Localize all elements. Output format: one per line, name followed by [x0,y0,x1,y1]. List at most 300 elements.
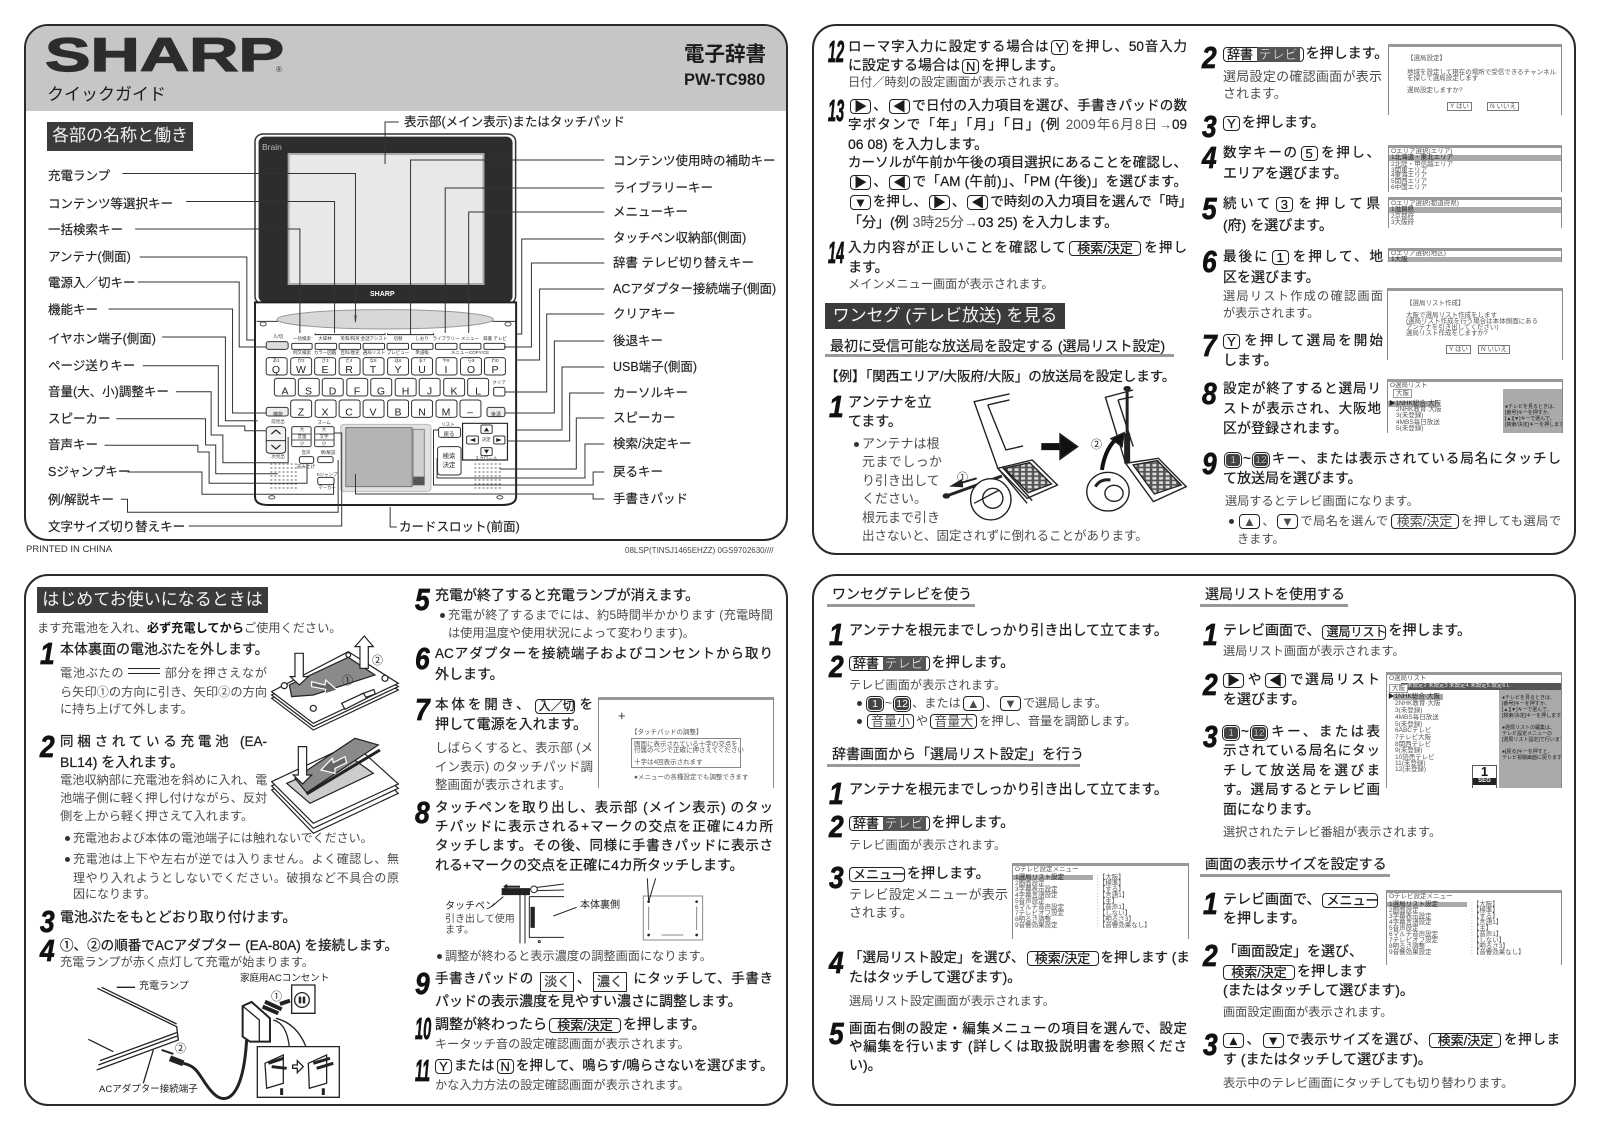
screen: list creation confirmation [1387,288,1563,360]
step 12: Y [1056,40,1064,55]
step 13: 06 08) を入力します。 [848,136,988,152]
screen: TV settings menu: 6マルチ音声設定 [1015,904,1064,911]
step 8: ストが表示され、大阪地 [1223,400,1381,416]
step 6: ACアダプターを接続端子およびコンセントから取り [435,646,773,661]
step 2: 選局設定の確認画面が表示 [1223,69,1382,84]
step 2: や を押し、音量を調節します。 [916,714,1136,728]
screen: station list: ●テレビを見るときは、 [1502,695,1555,701]
step 14: ます。 [848,259,889,275]
device illustration: X [321,406,329,418]
step 9: 濃く [597,974,623,988]
screen: TV settings menu 2: 5音声設定 [1389,925,1419,932]
device illustration: 英和/和英 [340,335,360,342]
screen: channel setting confirmation: を探して選局設定します [1407,75,1478,82]
device illustration: 会話アシスト [361,335,387,342]
screen: touchpad adjustment: ●メニューの各種設定でも調整できます [634,774,748,781]
heading: parts [47,122,193,151]
device illustration: F [354,386,360,398]
step 5: 5 [1202,191,1217,226]
label: ページ送りキー [48,359,135,373]
screen: station list: [検索/決定]キーを押します [1502,713,1561,719]
panel: first use [24,574,788,1106]
step 2 [828,649,1136,729]
step 2: insert battery [39,729,267,822]
device illustration: マーカー [318,485,336,491]
step 6: が表示されます。 [1223,306,1319,320]
label: AC jack: ACアダプター接続端子 [99,1084,198,1095]
bullet notes: 因になります。 [73,887,156,901]
step 5: 3 [1281,197,1288,212]
screen: TV settings menu 2: 3字幕表示設定 [1389,913,1432,920]
step 1: remove cover: 本体裏面の電池ぶたを外します。 [60,641,269,657]
screen: list creation confirmation: 大阪で選局リスト作成をします [1406,312,1497,319]
illustration: remove battery cover [270,635,400,731]
step 11 [415,1053,773,1092]
device illustration: 決定 [482,436,491,443]
step 1: antenna: 根元まで引き [862,510,940,525]
screen: area selection: 4東海エリア [1391,172,1427,179]
device illustration: 選局リスト [363,349,385,356]
step 14 [828,235,1187,290]
step 13: ▶ [854,99,867,114]
device illustration: V [369,406,377,418]
step 7: 入／切 [539,699,575,713]
screen: station list: SEG [1478,778,1491,784]
step 5: 5 [829,1016,844,1050]
screen: prefecture selection: 3大阪府 [1391,219,1414,226]
step 2: 2 [1203,938,1218,973]
step 13: を押し、 、 で時刻の入力項目を選んで「時」 [873,194,1192,209]
label: クリアキー [613,307,676,321]
label: 充電ランプ [48,169,110,183]
screen: TV settings menu 2: :【音響効果なし】 [1471,949,1525,956]
screen: station list result: ▶1NHK総合·大阪 [1389,400,1441,407]
illustration: connect AC adapter [88,984,340,1100]
step 1: remove cover: 1 [40,636,55,671]
screen: station list: 5(未登録) [1395,721,1422,728]
label: 音量(大、小)調整キー [48,385,169,399]
step 12: に設定する場合は を押します。 [848,57,1064,73]
device illustration [254,133,518,506]
logo: SHARP: ® [276,65,282,74]
illustration: remove battery cover: ② [372,652,383,668]
screen: station list: 3(未登録) [1395,707,1422,714]
subheading: using TV [827,585,975,607]
screen: touchpad adjustment: 十字は4回表示されます [634,759,703,766]
screen: station list: [番号]キーを押すか、 [1502,701,1550,707]
label: 文字サイズ切り替えキー [48,520,185,534]
subheading: using TV: ワンセグテレビを使う [832,586,972,602]
screen: station list: ●[戻る]キーを押すと、 [1502,749,1553,755]
step 2: ▶ [1227,672,1240,688]
step 3: す。選局するとテレビ画 [1223,782,1380,797]
label: ACアダプター接続端子(側面) [613,282,776,296]
screen: station list: テレビ設定メニューの [1502,731,1552,737]
step 8: タッチします。その後、同様に手書きパッドに表示さ [435,838,773,853]
step 2: されます。 [1223,86,1287,100]
device illustration: Y [394,364,402,376]
device illustration: 次見出 [271,453,285,460]
screen: station list result: O選局リスト [1390,382,1428,389]
step 2: 2 [1202,40,1217,74]
step 9 [415,966,773,1009]
screen: station list: O選局リスト [1389,675,1427,682]
step 1: を押します。 [1223,910,1306,926]
screen: station list: 1 [1481,764,1488,779]
step 13: ◀ [893,99,906,114]
step 9: 選局するとテレビ画面になります。 [1225,494,1419,508]
device illustration: 音声 [302,449,311,456]
screen: TV settings menu [1012,863,1189,939]
device illustration: 大 [322,426,327,433]
step 7: しばらくすると、表示部 (メ [435,741,593,755]
label: スピーカー [48,412,111,426]
screen: station list: 12(未登録) [1395,766,1426,773]
step 2: を押します。 [1306,44,1388,60]
step 13: 「分」(例 3時25分→03 25) を入力します。 [848,214,1118,230]
device illustration: ズーム [317,419,331,426]
step 5: は使用温度や使用状況によって変わります)。 [448,626,695,640]
bullet notes: 充電池は上下や左右が逆では入りません。よく確認し、無 [73,852,399,866]
step 4 [829,949,1187,1010]
heading: first use [37,587,268,613]
device illustration: 単語帳 [415,349,429,356]
screen: station list: ●選局リストの編集は、 [1502,725,1555,731]
device illustration: L [475,386,481,398]
label: ライブラリーキー [613,181,713,195]
screen: TV settings menu: 2画面設定 [1015,880,1045,887]
label: カードスロット(前面) [399,520,520,534]
label: 戻るキー [613,465,663,479]
step 7: イン表示) のタッチパッド調 [435,760,593,774]
device illustration: か2 [297,357,305,364]
screen: TV settings menu: :【標準】 [1097,880,1125,887]
step 7: を押して選局を開始 [1242,333,1383,348]
step 9: て放送局を選びます。 [1223,470,1362,486]
step 3: 面になります。 [1223,801,1320,817]
step 3: テレビ設定メニューが表示 [849,887,1008,902]
step 4: 5 [1305,146,1313,161]
step 8: れる+マークの交点を正確に4カ所タッチします。 [435,856,744,872]
screen: list creation confirmation: Y はい [1449,346,1468,353]
screen: TV settings menu 2: :【大阪】 [1471,901,1499,908]
screen: station list: 8関西テレビ [1395,741,1431,748]
screen: station list: [▲][▼]キーで選んで、 [1502,707,1552,713]
step 7: Y [1227,334,1236,349]
step 3: 3 [1202,109,1217,144]
step 5: 充電が終了するまでには、約5時間半かかります (充電時間 [448,608,773,622]
screen: station list: 9(未登録) [1395,747,1422,754]
device illustration: 大 [300,426,305,433]
screen: TV settings menu: Oテレビ設定メニュー [1015,866,1079,873]
device illustration: 前見出 [271,418,285,425]
step 13: カーソルが午前か午後の項目選択にあることを確認し、 [848,155,1187,170]
device illustration: O [467,364,475,376]
label: コンテンツ使用時の補助キー [613,154,776,168]
screen: TV settings menu 2: :【言語1】 [1471,919,1502,926]
step 14: 入力内容が正しいことを確認して を押し [848,240,1187,255]
step 2: 音量小 [871,714,910,729]
screen: channel setting confirmation: N いいえ [1490,103,1516,110]
label: カーソルキー [613,386,688,400]
screen: TV settings menu 2 [1386,890,1562,965]
step 1: 選局リスト画面が表示されます。 [1223,644,1405,658]
step 9: 、 で局名を選んで を押しても選局で [1262,514,1561,528]
device illustration: 切替 [394,335,403,342]
subheading: use list: 選局リストを使用する [1205,586,1345,602]
step 5: (府) を選びます。 [1223,217,1333,233]
screen: station list result: 2NHK教育·大阪 [1396,406,1442,413]
screen: touchpad adjustment [598,697,774,788]
step 7: 本体を開き、 を [435,697,593,712]
step 14: メインメニュー画面が表示されます。 [848,276,1054,290]
step 13: ▼ [854,195,867,210]
note: 調整が終わると表示濃度の調整画面になります。 [445,949,712,963]
step 3: 選択されたテレビ番組が表示されます。 [1223,824,1441,838]
logo: SHARP [45,28,284,81]
screen: list creation confirmation: 選局リスト作成をしますか? [1406,330,1488,337]
screen: TV settings menu: 4字幕言語設定 [1015,892,1058,899]
step 2: テレビ画面が表示されます。 [849,678,1006,692]
label: 表示部(メイン表示)またはタッチパッド [404,115,625,129]
device illustration: ライブラリー [432,335,460,342]
step 14: 検索/決定 [1077,241,1133,256]
device illustration: 後退 [491,411,501,418]
screen: list creation confirmation: 【選局リスト作成】 [1406,300,1464,307]
device illustration: 機能 [273,411,283,418]
step 2: insert battery: 2 [40,729,55,764]
screen: prefecture selection: 2京都府 [1391,213,1414,220]
screen: station list result: 大阪 [1396,390,1409,397]
screen: TV settings menu 2: :【標準】 [1471,907,1499,914]
step 5 [414,582,773,640]
device illustration: C [345,406,353,418]
screen: channel setting confirmation [1388,44,1562,115]
step 10 [415,1011,706,1051]
step 2: insert battery: 側を上から軽く押さえて入れます。 [60,808,253,822]
step 5: 充電が終了すると充電ランプが消えます。 [435,586,699,602]
device illustration: 文字 [320,433,329,440]
step 8: 設定が終了すると選局リ [1223,381,1381,396]
step 3: 、 で表示サイズを選び、 を押しま [1246,1032,1560,1047]
step 9: 12 [1255,454,1267,466]
screen: prefecture selection [1388,197,1562,228]
step 1: remove cover: に持ち上げて外します。 [60,702,193,716]
step 7: 7 [415,692,430,727]
illustration: raising antenna: ① [957,469,968,485]
screen: TV settings menu: :【言語1】 [1097,892,1128,899]
screen: station list: 未設定2 未設定3 未設定4 未設定5 設定6 L [1407,683,1510,689]
step 8 [415,794,773,872]
step 6: 選局リスト作成の確認画面 [1223,288,1383,302]
step 2: 辞書 テレビ [1227,46,1298,62]
screen: TV settings menu 2: 9音響効果設定 [1389,949,1432,956]
screen: district selection: Oエリア選択(地区) [1391,250,1446,257]
label: USB端子(側面) [613,360,697,374]
device illustration: 読み上げ [297,463,315,470]
device illustration: 小 [322,440,327,447]
screen: station list result: 3(未登録) [1396,412,1423,419]
step 9: 1 [1230,454,1236,466]
screen: TV settings menu 2: 6マルチ音声設定 [1389,931,1438,938]
step 7: 7 [1202,328,1217,363]
device illustration: K [450,386,458,398]
step 2: ▼ [1004,696,1017,711]
screen: channel setting confirmation: 【選局設定】 [1407,55,1446,62]
step 3: Y [1227,116,1236,131]
step 4: エリアを選びます。 [1223,165,1348,181]
step 2: 画面設定画面が表示されます。 [1223,1005,1392,1019]
step 9: ▼ [1281,514,1294,528]
step 13: ▶ [854,175,867,190]
screen: district selection [1388,248,1562,262]
step 4: 「選局リスト設定」を選び、 を押します (ま [849,950,1190,965]
step 1: remove cover [40,636,269,716]
step 13: 、 で「AM (午前)」、「PM (午後)」を選びます。 [873,174,1187,189]
title: quick guide: クイックガイド [47,85,166,104]
screen: TV settings menu 2: 4字幕言語設定 [1389,919,1432,926]
step 2: を押します。 [932,814,1014,830]
step 2: (またはタッチして選びます)。 [1223,982,1414,998]
step 2: ◀ [1269,672,1282,688]
step 10: 10 [415,1011,431,1046]
step 1: antenna: 元までしっか [862,454,942,469]
heading: first use: はじめてお使いになるときは [42,590,263,609]
screen: station list: 6ABCテレビ [1395,727,1431,734]
device illustration: E [321,364,329,376]
title: electronic dictionary: 電子辞書 [684,43,766,66]
step 3: 3 [829,860,844,894]
step 6: 外します。 [435,666,504,682]
label: スピーカー [613,411,676,425]
bullet notes [65,831,399,901]
screen: list creation confirmation: N いいえ [1481,346,1507,353]
step 4: 選局リスト設定画面が表示されます。 [849,994,1055,1008]
screen: TV settings menu: 5音声設定 [1015,898,1045,905]
screen: TV settings menu: :【しない】 [1097,910,1131,917]
step 9: ~ キー、または表示されている局名にタッチし [1243,451,1561,466]
device illustration: 一括検索 [293,335,311,342]
step 3: す (またはタッチして選びます)。 [1223,1051,1432,1067]
step 2 [1203,670,1380,708]
step 3: されます。 [849,905,913,920]
step 3: 表示中のテレビ画面にタッチしても切り替わります。 [1223,1076,1513,1090]
screen: station list: テレビ視聴画面に戻ります [1502,755,1562,761]
leader lines [104,122,604,528]
step 8 [1202,376,1381,436]
example text: 【例】「関西エリア/大阪府/大阪」の放送局を設定します。 [825,369,1175,384]
step 9: きます。 [1237,532,1285,546]
step 9: パッドの表示濃度を見やすい濃さに調整します。 [435,993,742,1009]
subheading: screen size [1200,855,1390,877]
footer: printed in China: PRINTED IN CHINA [26,544,112,555]
screen: TV settings menu 2: Oテレビ設定メニュー [1389,893,1453,900]
subheading: station list setting: 最初に受信可能な放送局を設定する (選局リスト設定) [830,338,1165,354]
step 3: ▲ [1227,1033,1240,1048]
label: メニューキー [613,205,688,219]
header band [26,26,786,111]
step 1: アンテナを根元までしっかり引き出して立てます。 [849,622,1168,638]
device illustration: H [402,386,409,398]
screen: station list: 11(未登録) [1395,760,1426,767]
step 3: 1 [1228,726,1234,738]
step 1: antenna: アンテナは根 [862,436,939,451]
heading: one-seg [825,303,1065,329]
screen: station list result [1387,379,1563,433]
step 1 [1203,620,1473,660]
step 6: 区を選びます。 [1223,268,1320,284]
bullet notes: 理やり入れようとしないでください。破損など不具合の原 [73,870,399,884]
screen: TV settings menu 2: :【しない】 [1471,937,1505,944]
device illustration: カラー図鑑 [314,349,337,356]
step 2: 音量大 [934,714,973,729]
step 2: insert battery: BL14) を入れます。 [60,754,184,770]
step 9: 淡く [544,974,570,988]
step 13: 、 で日付の入力項目を選び、手書きパッドの数 [873,98,1187,113]
label: touch pen: タッチペン [445,901,495,912]
illustration: raising antenna: ② [1091,436,1102,452]
label: イヤホン端子(側面) [48,332,156,346]
label: 例/解説キー [48,493,114,507]
step 2 [1201,40,1388,100]
step 12: N [966,59,975,74]
screen: TV settings menu 2: 7テレビオフ設定 [1389,937,1438,944]
step 1: antenna: 1 [829,389,844,424]
device illustration: クリア [492,380,506,386]
label: device back: 本体裏側 [580,900,620,911]
device illustration: R [345,364,353,376]
screen: TV settings menu: :【音響効果なし】 [1097,922,1151,929]
device illustration: – [467,406,473,418]
step 6 [1202,244,1383,320]
screen: TV settings menu: 8明るさ調整 [1015,916,1051,923]
step 8: 8 [415,794,430,830]
step 12: 日付／時刻の設定画面が表示されます。 [848,75,1066,89]
heading: parts: 各部の名称と働き [52,126,188,145]
step 2: 辞書 テレビ [853,816,924,830]
step 13: ◀ [893,175,906,190]
heading: one-seg: ワンセグ (テレビ放送) を見る [833,306,1057,325]
step 11: かな入力方法の設定確認画面が表示されます。 [435,1078,690,1092]
label: 手書きパッド [613,492,688,506]
step 6: 6 [1202,244,1217,278]
screen: TV settings menu 2: 2画面設定 [1389,907,1419,914]
device illustration: メニュー [461,336,479,341]
label: Sジャンプキー [48,465,130,479]
step 3 [829,864,1008,922]
screen: TV settings menu 2: :【主】 [1471,925,1492,932]
screen: prefecture selection: 1滋賀県 [1391,206,1414,213]
step 13: 13 [828,93,844,128]
step 2: 12 [896,698,908,710]
step 5: 5 [415,582,430,616]
label: touch pen [445,900,515,936]
step 6 [415,641,773,682]
step 3 [40,904,296,939]
step 2: 2 [1203,666,1218,702]
step 2: insert battery: 電池収納部に充電池を斜めに入れ、電 [60,772,267,786]
step 2: や で選局リスト [1246,672,1380,686]
step 3 [1203,722,1380,840]
device illustration: 大辞林 [318,335,332,342]
step 3: を押します。 [907,864,990,880]
device illustration: 百科/歴史 [340,349,360,356]
step 5: い)。 [849,1057,882,1073]
device illustration: ま7 [418,358,426,363]
step 3 [1202,109,1325,144]
label: コンテンツ等選択キー [48,197,173,211]
screen: station list: 7テレビ大阪 [1395,734,1431,741]
